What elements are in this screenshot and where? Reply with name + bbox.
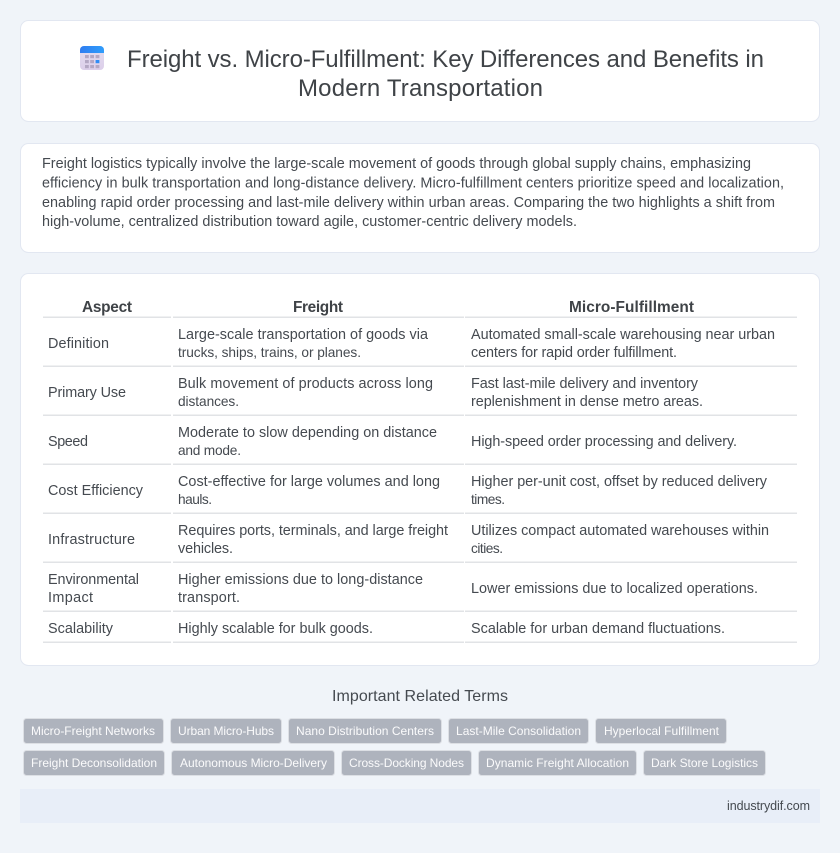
- row: environmental impact: Lower emissions due to localized operations.: [471, 581, 758, 597]
- row: speed: Speed: [48, 434, 88, 450]
- intro paragraph: efficiency in bulk transportation and long-distance delivery. Micro-fulfillment centers prioritize speed and localization,: [42, 176, 784, 192]
- chip: Micro-Freight Networks: [31, 724, 155, 738]
- row: environmental impact: Higher emissions due to long-distance: [178, 572, 423, 588]
- row: primary use: replenishment in dense metro areas.: [471, 394, 703, 410]
- row: infrastructure: Requires ports, terminals, and large freight: [178, 523, 448, 539]
- intro paragraph: high-volume, centralized distribution toward agile, customer-centric delivery models.: [42, 214, 577, 230]
- panel: comparison table: [20, 274, 820, 666]
- row: environmental impact: Impact: [48, 590, 93, 606]
- chip: [172, 750, 334, 776]
- chip: [644, 750, 766, 776]
- row: scalability: [48, 621, 725, 637]
- intro paragraph: enabling rapid order processing and last-mile delivery within urban areas. Comparing the two highlights a shift from: [42, 195, 775, 211]
- footer: [20, 789, 820, 823]
- chip: Urban Micro-Hubs: [178, 724, 274, 738]
- intro paragraph: [42, 156, 784, 230]
- row: primary use: distances.: [178, 394, 239, 409]
- row: environmental impact: Environmental: [48, 572, 139, 588]
- row: definition: [48, 327, 775, 361]
- heading: related terms: Important Related Terms: [332, 688, 508, 705]
- chip: Hyperlocal Fulfillment: [604, 724, 720, 738]
- chip: Freight Deconsolidation: [31, 756, 157, 770]
- row: primary use: Bulk movement of products across long: [178, 376, 433, 392]
- row: primary use: Primary Use: [48, 385, 126, 401]
- row: infrastructure: Utilizes compact automated warehouses within: [471, 523, 769, 539]
- chip: [448, 718, 588, 744]
- row: scalability: Scalability: [48, 621, 114, 637]
- chip: [170, 718, 282, 744]
- chip: [478, 750, 636, 776]
- header panel: [20, 20, 820, 122]
- row: cost efficiency: Higher per-unit cost, offset by reduced delivery: [471, 474, 768, 490]
- row: definition: trucks, ships, trains, or planes.: [178, 345, 361, 360]
- row: definition: centers for rapid order fulfillment.: [471, 345, 677, 361]
- row: scalability: Scalable for urban demand fluctuations.: [471, 621, 725, 637]
- row: infrastructure: vehicles.: [178, 541, 233, 557]
- row: speed: Moderate to slow depending on distance: [178, 425, 437, 441]
- row: primary use: Fast last-mile delivery and inventory: [471, 376, 699, 392]
- icon: calendar: [80, 46, 104, 70]
- row: infrastructure: Infrastructure: [48, 532, 135, 548]
- title: Freight vs. Micro-Fulfillment: Key Differences and Benefits in: [127, 46, 764, 73]
- row: cost efficiency: Cost-effective for large volumes and long: [178, 474, 440, 490]
- row: infrastructure: [48, 523, 769, 557]
- table header: Freight: [293, 299, 343, 316]
- intro paragraph: Freight logistics typically involve the large-scale movement of goods through global supply chains, emphasizing: [42, 156, 751, 172]
- panel: intro text: [20, 144, 820, 252]
- chip: Nano Distribution Centers: [296, 724, 434, 738]
- chip: [288, 718, 442, 744]
- chip: Last-Mile Consolidation: [456, 724, 581, 738]
- row: definition: Definition: [48, 336, 109, 352]
- row: definition: Automated small-scale warehousing near urban: [471, 327, 775, 343]
- title: Modern Transportation: [298, 75, 543, 102]
- row: cost efficiency: times.: [471, 492, 505, 507]
- table header: [82, 299, 694, 316]
- chip: Dark Store Logistics: [651, 756, 758, 770]
- row: primary use: [48, 376, 703, 410]
- related term chips: [24, 718, 766, 776]
- chip: Autonomous Micro-Delivery: [180, 756, 327, 770]
- row: speed: [48, 425, 737, 458]
- row: scalability: Highly scalable for bulk goods.: [178, 621, 373, 637]
- row: infrastructure: cities.: [471, 541, 503, 556]
- row: speed: High-speed order processing and delivery.: [471, 434, 737, 450]
- row: definition: Large-scale transportation of goods via: [178, 327, 428, 343]
- chip: [24, 750, 164, 776]
- chip: [342, 750, 472, 776]
- chip: [596, 718, 726, 744]
- chip: [24, 718, 164, 744]
- row: cost efficiency: [48, 474, 768, 507]
- footer: industrydif.com: [727, 799, 810, 813]
- row: speed: and mode.: [178, 443, 241, 458]
- chip: Cross-Docking Nodes: [349, 756, 464, 770]
- row: cost efficiency: Cost Efficiency: [48, 483, 144, 499]
- title: [127, 46, 764, 102]
- table header: Aspect: [82, 299, 132, 316]
- table header: Micro-Fulfillment: [569, 299, 694, 316]
- row: cost efficiency: hauls.: [178, 492, 212, 507]
- row: environmental impact: transport.: [178, 590, 240, 606]
- chip: Dynamic Freight Allocation: [486, 756, 629, 770]
- row: environmental impact: [48, 572, 758, 606]
